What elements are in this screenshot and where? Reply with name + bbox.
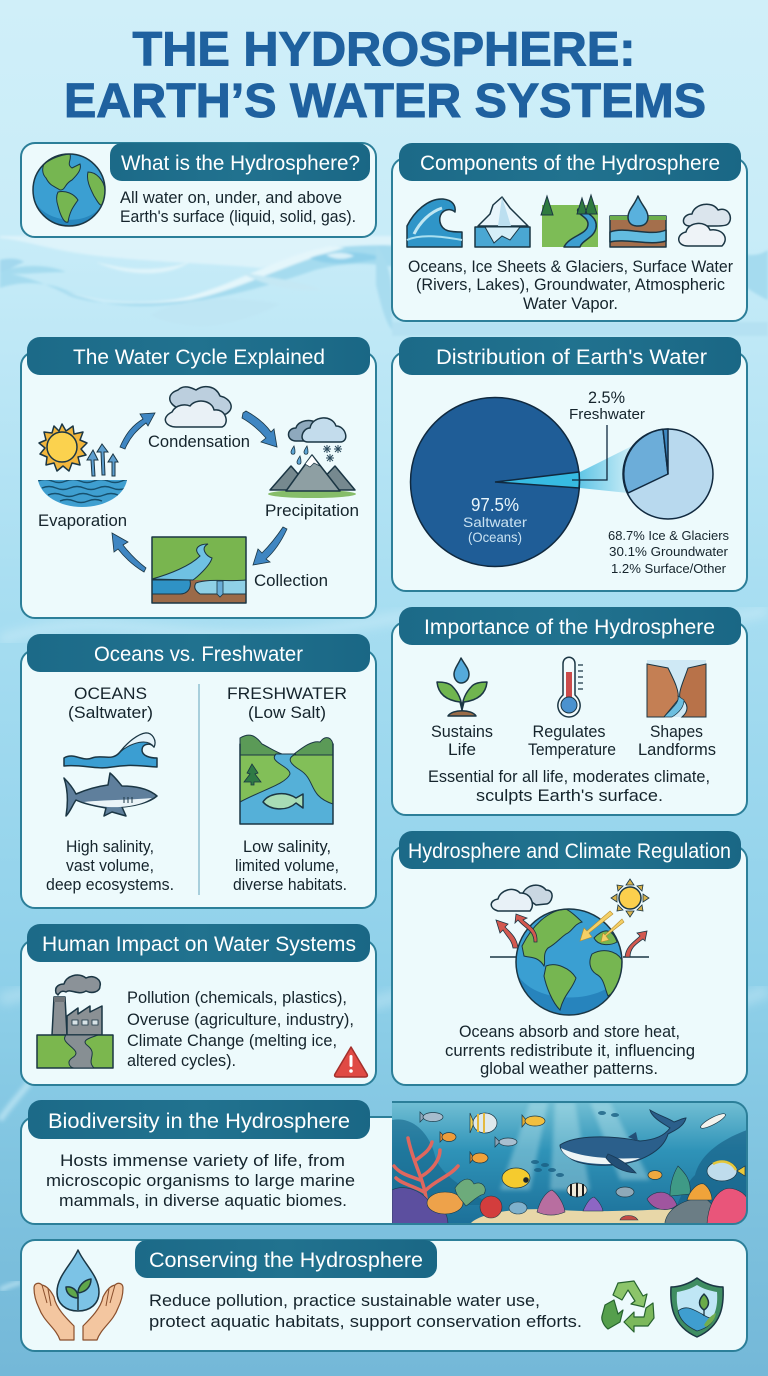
- body text: [408, 257, 733, 313]
- body text: currents redistribute it, influencing: [445, 1041, 695, 1060]
- label: sustains life: Life: [448, 740, 476, 759]
- heading pill: [135, 1240, 437, 1278]
- icon: freshwater river with fish: [240, 735, 333, 824]
- icon: warning triangle: [335, 1047, 367, 1077]
- chart: saltwater and freshwater pie: [410, 398, 638, 566]
- label: 2.5% freshwater: [569, 388, 645, 423]
- panel: distribution of earth's water: [392, 337, 747, 591]
- legend: freshwater breakdown: 68.7% Ice & Glaciers: [608, 528, 729, 543]
- body text: Earth's surface (liquid, solid, gas).: [120, 207, 356, 226]
- heading pill: [28, 1100, 370, 1139]
- column text: oceans: High salinity,: [66, 837, 154, 856]
- panel: what is the hydrosphere: [21, 143, 376, 237]
- label: regulates temperature: Temperature: [528, 740, 616, 759]
- heading pill: Conserving the Hydrosphere: [149, 1248, 423, 1272]
- label: sustains life: [431, 722, 493, 759]
- body text: Oceans absorb and store heat,: [459, 1022, 680, 1041]
- icon: sun: [611, 879, 649, 917]
- icon: evaporation arrows: [87, 444, 118, 476]
- column text: oceans: [46, 837, 174, 894]
- heading pill: [27, 924, 370, 962]
- panel: components of the hydrosphere: [392, 143, 747, 321]
- body text: Pollution (chemicals, plastics),: [127, 988, 347, 1007]
- column title: freshwater: [227, 684, 347, 722]
- body text: [149, 1291, 582, 1331]
- icon: sprout with water drop: [437, 658, 487, 716]
- legend: freshwater breakdown: [608, 528, 729, 576]
- column text: freshwater: [233, 837, 347, 894]
- icon: sea bowl: [38, 480, 127, 507]
- label: shapes landforms: Landforms: [638, 740, 716, 759]
- icon: river collection scene: [152, 537, 246, 603]
- legend: freshwater breakdown: 1.2% Surface/Other: [611, 561, 727, 576]
- illustration: underwater scene: [392, 1102, 747, 1224]
- column title: oceans: [68, 684, 153, 722]
- label: 97.5% saltwater: 97.5%: [471, 495, 519, 515]
- body text: Reduce pollution, practice sustainable water use,: [149, 1291, 540, 1310]
- body text: [127, 988, 354, 1070]
- heading pill: Hydrosphere and Climate Regulation: [408, 839, 731, 863]
- heading pill: [399, 607, 741, 645]
- label: 97.5% saltwater: (Oceans): [468, 529, 522, 545]
- heading pill: Importance of the Hydrosphere: [424, 615, 715, 639]
- icon: mountains: [268, 455, 356, 498]
- column title: freshwater: (Low Salt): [248, 703, 326, 722]
- title: [64, 24, 706, 128]
- icon: sun: [39, 424, 87, 471]
- body text: microscopic organisms to large marine: [46, 1171, 355, 1190]
- label: sustains life: Sustains: [431, 722, 493, 741]
- heading pill: [399, 143, 741, 181]
- body text: [445, 1022, 695, 1078]
- label: shapes landforms: [638, 722, 716, 759]
- icon: thermometer: [558, 657, 583, 717]
- heading pill: Human Impact on Water Systems: [42, 932, 356, 956]
- heading pill: Oceans vs. Freshwater: [94, 642, 303, 666]
- label: precipitation: Precipitation: [265, 501, 359, 520]
- icon: hands holding water drop with sprout: [34, 1250, 123, 1340]
- icon: ocean wave: [64, 733, 157, 768]
- heading pill: [399, 337, 741, 375]
- arrow: precipitation to collection: [253, 527, 287, 565]
- reef rocks and corals: [392, 1166, 747, 1224]
- icon: atmospheric clouds: [679, 204, 730, 246]
- heading pill: Distribution of Earth's Water: [436, 345, 707, 369]
- body text: (Rivers, Lakes), Groundwater, Atmospheric: [416, 275, 725, 294]
- label: regulates temperature: Regulates: [532, 722, 606, 741]
- body text: sculpts Earth's surface.: [476, 786, 663, 805]
- icon: iceberg: [475, 197, 530, 247]
- leader line: 2.5% freshwater: [572, 425, 607, 480]
- body text: All water on, under, and above: [120, 188, 342, 207]
- icon: river landscape: [541, 195, 598, 247]
- panel: hydrosphere and climate regulation: [392, 831, 747, 1085]
- body text: Hosts immense variety of life, from: [60, 1151, 345, 1170]
- title: THE HYDROSPHERE:: [132, 24, 636, 76]
- body text: Overuse (agriculture, industry),: [127, 1010, 354, 1029]
- icon: groundwater: [610, 196, 666, 247]
- label: 2.5% freshwater: Freshwater: [569, 406, 645, 423]
- body text: Oceans, Ice Sheets & Glaciers, Surface Water: [408, 257, 733, 276]
- body text: [46, 1151, 355, 1210]
- column text: oceans: vast volume,: [66, 856, 154, 875]
- arrow: collection to evaporation: [112, 533, 146, 572]
- fish: [420, 1111, 745, 1197]
- chart: freshwater breakdown pie: [623, 429, 713, 519]
- body text: Essential for all life, moderates climate,: [428, 767, 710, 786]
- heading pill: The Water Cycle Explained: [73, 345, 325, 369]
- icon: shield with landscape: [671, 1278, 723, 1337]
- body text: mammals, in diverse aquatic biomes.: [59, 1191, 347, 1210]
- body text: altered cycles).: [127, 1051, 236, 1070]
- icon: ocean wave: [407, 199, 462, 247]
- label: 97.5% saltwater: Saltwater: [463, 514, 527, 530]
- icon: shark: [64, 773, 157, 816]
- panel: importance of the hydrosphere: [392, 607, 747, 815]
- label: 97.5% saltwater: [463, 495, 527, 545]
- arrow: condensation to precipitation: [242, 411, 277, 447]
- panel: the water cycle: [21, 337, 376, 618]
- arrow: evaporation to condensation: [120, 413, 155, 449]
- title: EARTH’S WATER SYSTEMS: [64, 75, 706, 128]
- heading pill: Components of the Hydrosphere: [420, 151, 720, 175]
- heading pill: What is the Hydrosphere?: [121, 151, 360, 175]
- heading pill: [399, 831, 741, 869]
- column text: freshwater: diverse habitats.: [233, 875, 347, 894]
- legend: freshwater breakdown: 30.1% Groundwater: [609, 544, 729, 559]
- column title: oceans: (Saltwater): [68, 703, 153, 722]
- label: regulates temperature: [528, 722, 616, 759]
- body text: Climate Change (melting ice,: [127, 1031, 337, 1050]
- icon: condensation cloud: [165, 387, 231, 427]
- red coral: [394, 1138, 458, 1198]
- body text: Water Vapor.: [523, 294, 618, 313]
- icon: earth globe: [516, 909, 622, 1025]
- icon: cloud: [491, 885, 552, 911]
- label: evaporation: Evaporation: [38, 511, 127, 530]
- body text: protect aquatic habitats, support conservation efforts.: [149, 1312, 582, 1331]
- icon: earth globe: [33, 154, 105, 234]
- label: shapes landforms: Shapes: [650, 722, 703, 741]
- body text: [120, 188, 356, 226]
- column text: freshwater: Low salinity,: [243, 837, 331, 856]
- column title: freshwater: FRESHWATER: [227, 684, 347, 703]
- column text: oceans: deep ecosystems.: [46, 875, 174, 894]
- column title: oceans: OCEANS: [74, 684, 147, 703]
- whale: [560, 1110, 686, 1173]
- label: condensation: Condensation: [148, 432, 250, 451]
- panel: human impact: [21, 924, 376, 1085]
- arrows: heat rising: [496, 914, 647, 957]
- heading pill: [110, 143, 370, 181]
- icon: precipitation cloud, rain and snow: [288, 418, 346, 464]
- icon: canyon: [647, 660, 706, 717]
- icon: recycle symbol: [602, 1281, 654, 1332]
- body text: [428, 767, 710, 805]
- heading pill: [27, 634, 370, 672]
- icon: polluting factory: [37, 975, 113, 1068]
- heading pill: [27, 337, 370, 375]
- label: collection: Collection: [254, 571, 328, 590]
- label: 2.5% freshwater: 2.5%: [588, 388, 625, 407]
- panel: oceans vs. freshwater: [21, 634, 376, 908]
- heading pill: Biodiversity in the Hydrosphere: [48, 1109, 350, 1133]
- panel: biodiversity: [21, 1100, 747, 1224]
- column text: freshwater: limited volume,: [235, 856, 339, 875]
- body text: global weather patterns.: [480, 1059, 658, 1078]
- panel: conserving the hydrosphere: [21, 1240, 747, 1351]
- arrows: incoming sunlight: [580, 911, 624, 942]
